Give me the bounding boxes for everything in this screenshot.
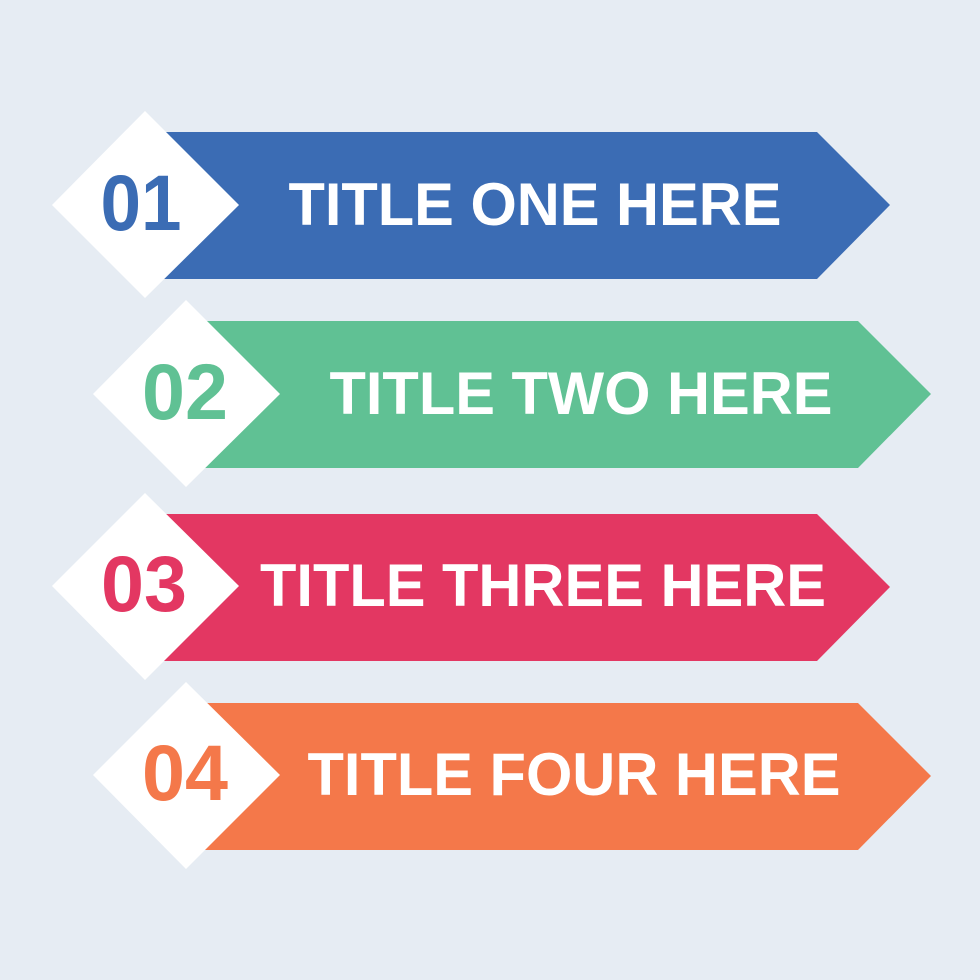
title one: TITLE ONE HERE — [288, 171, 782, 238]
banner 02 — [93, 300, 931, 487]
diamond badge 02 — [93, 300, 280, 487]
title three: TITLE THREE HERE — [260, 552, 826, 619]
number 03: 03 — [101, 539, 187, 628]
banner 01 — [52, 111, 890, 298]
banner 04 — [93, 682, 931, 869]
diamond badge 04 — [93, 682, 280, 869]
title four: TITLE FOUR HERE — [308, 741, 840, 808]
arrow: green — [186, 321, 931, 468]
arrow: crimson — [145, 514, 890, 661]
number 02: 02 — [142, 347, 228, 436]
diamond badge 03 — [52, 493, 239, 680]
banner 03 — [52, 493, 890, 680]
number 04: 04 — [142, 728, 228, 817]
diamond badge 01 — [52, 111, 239, 298]
title two: TITLE TWO HERE — [330, 360, 832, 427]
arrow: blue — [145, 132, 890, 279]
arrow: orange — [186, 703, 931, 850]
number 01: 01 — [100, 158, 182, 247]
